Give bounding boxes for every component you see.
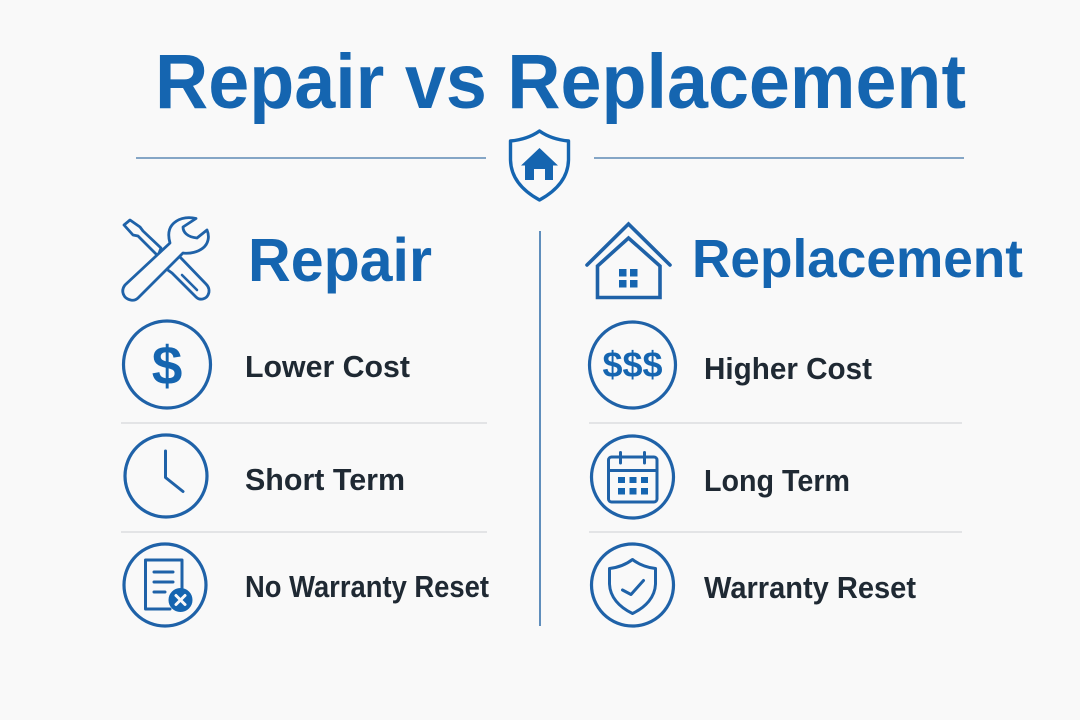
label: short term: Short Term <box>245 462 405 497</box>
icon: house <box>587 224 670 298</box>
icon: shield check <box>592 544 674 626</box>
icon: dollar: $ <box>152 334 182 396</box>
label: warranty reset: Warranty Reset <box>704 570 916 605</box>
heading: repair: Repair <box>248 226 432 294</box>
label: no warranty reset: No Warranty Reset <box>245 569 489 604</box>
panel: replacement <box>587 224 1023 626</box>
icon: dollar <box>124 321 210 408</box>
icon: triple dollar: $$$ <box>602 344 662 385</box>
icon: document with x badge <box>124 544 206 626</box>
heading: replacement: Replacement <box>692 229 1023 289</box>
panel: repair <box>121 218 489 626</box>
label: higher cost: Higher Cost <box>704 351 872 386</box>
title: Repair vs Replacement <box>155 39 966 125</box>
icon: triple dollar <box>590 322 676 408</box>
icon: shield with house <box>510 131 568 200</box>
label: lower cost: Lower Cost <box>245 349 410 384</box>
icon: crossed wrench and screwdriver <box>123 218 209 300</box>
label: long term: Long Term <box>704 463 850 498</box>
icon: calendar <box>592 436 674 518</box>
icon: clock <box>125 435 207 517</box>
